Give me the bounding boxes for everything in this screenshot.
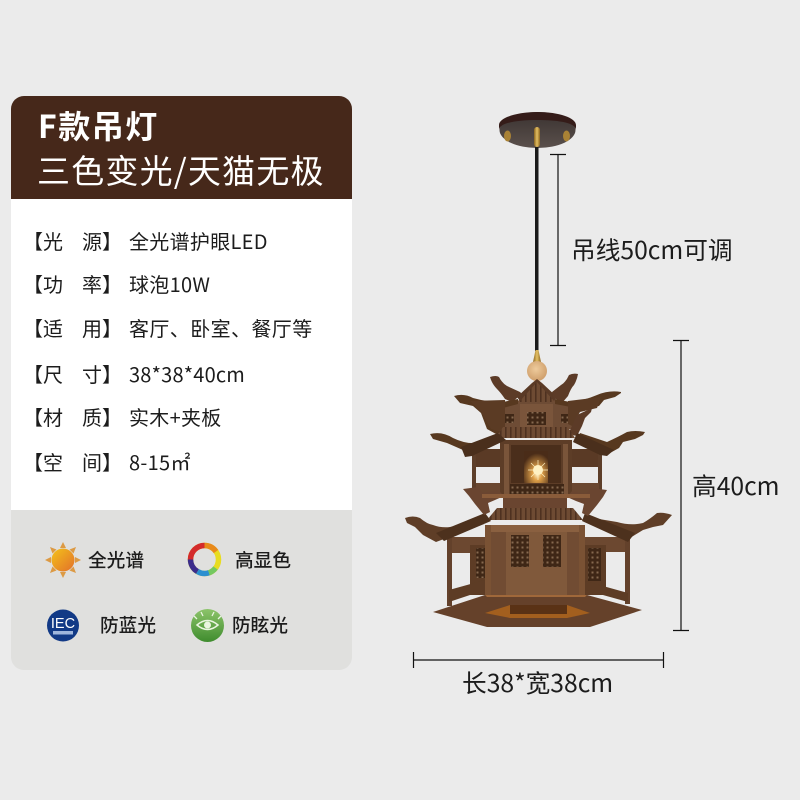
ceiling canopy [499, 112, 576, 148]
dimension: cord length [550, 154, 733, 346]
spec: suitable rooms: 【适 [23, 313, 63, 342]
left wing root [470, 400, 505, 433]
spec: power: 率】 [82, 269, 122, 298]
flying brackets [463, 487, 504, 515]
spec: light source [23, 226, 268, 255]
spec: size: 【尺 [23, 359, 63, 388]
dimension: width: 长38*宽38cm [462, 664, 613, 700]
panel background [11, 96, 352, 670]
lower body [447, 525, 630, 606]
dimension: cord length: 吊线50cm可调 [571, 231, 733, 267]
spec: space [23, 447, 191, 476]
dimension: width [414, 652, 664, 700]
icon: anti-glare eye [191, 609, 224, 642]
spec: power [23, 269, 210, 298]
icon: IEC blue badge [47, 610, 79, 642]
heading: feature subtitle: 三色变光/天猫无极 [37, 145, 325, 193]
far fretwork right [570, 449, 601, 467]
dimension: height: 高40cm [692, 467, 780, 503]
icon: full spectrum sun [45, 542, 81, 578]
hanging cord [535, 147, 538, 351]
panel: white spec area [11, 190, 352, 510]
spec: material: 【材 [23, 402, 63, 431]
right wing root [568, 397, 601, 426]
label: anti-glare: 防眩光 [232, 611, 288, 638]
brass ferrule [533, 350, 541, 362]
spec: light source: 源】 [82, 226, 122, 255]
spec: material [23, 402, 222, 431]
label: high colour rendering: 高显色 [235, 546, 291, 573]
spec: suitable rooms: 用】 [82, 313, 122, 342]
spec: material: 质】 [82, 402, 122, 431]
right eave [582, 513, 635, 542]
panel: specifications [11, 96, 352, 670]
middle roof tier [430, 427, 645, 457]
dimension: height [673, 340, 780, 630]
icon: colour ring [190, 546, 218, 574]
spec: size: 寸】 [82, 359, 122, 388]
right eave [573, 433, 614, 456]
railings [449, 580, 485, 602]
flying eaves top pair [490, 376, 522, 402]
left eave [461, 433, 506, 457]
label: full spectrum: 全光谱 [88, 546, 144, 573]
icon: IEC blue badge: IEC [51, 616, 75, 632]
second tier wings [454, 395, 518, 434]
spec: light source: 【光 [23, 226, 63, 255]
label: anti blue light: 防蓝光 [100, 611, 156, 638]
left eave [436, 513, 491, 541]
glowing bulb window [524, 451, 548, 483]
far fretwork left [474, 449, 504, 467]
spec: size: 38*38*40cm [129, 359, 245, 388]
spec: material: 实木+夹板 [129, 402, 222, 431]
spec: light source: 全光谱护眼LED [129, 226, 268, 255]
heading: model name: F款吊灯 [38, 102, 159, 148]
spec: power: 球泡10W [129, 269, 210, 298]
spec: power: 【功 [23, 269, 63, 298]
spec: space: 间】 [82, 447, 122, 476]
lower roof tier [405, 487, 672, 542]
spec: suitable rooms [23, 313, 313, 342]
left side: fretwork [447, 537, 492, 553]
spec: suitable rooms: 客厅、卧室、餐厅等 [129, 313, 313, 342]
door panels [506, 532, 567, 597]
top roof tier [454, 374, 621, 436]
spec: size [23, 359, 245, 388]
roof tiles top [517, 380, 557, 402]
hexagonal base [433, 595, 642, 627]
pendant lamp [405, 112, 672, 627]
spec: space: 8-15㎡ [129, 447, 191, 476]
upper body [497, 402, 577, 429]
wooden bead [527, 361, 547, 381]
right side: fretwork [585, 537, 629, 552]
middle body [472, 440, 602, 498]
spec: space: 【空 [23, 447, 63, 476]
lattice doors [511, 535, 529, 567]
header band [11, 96, 352, 199]
